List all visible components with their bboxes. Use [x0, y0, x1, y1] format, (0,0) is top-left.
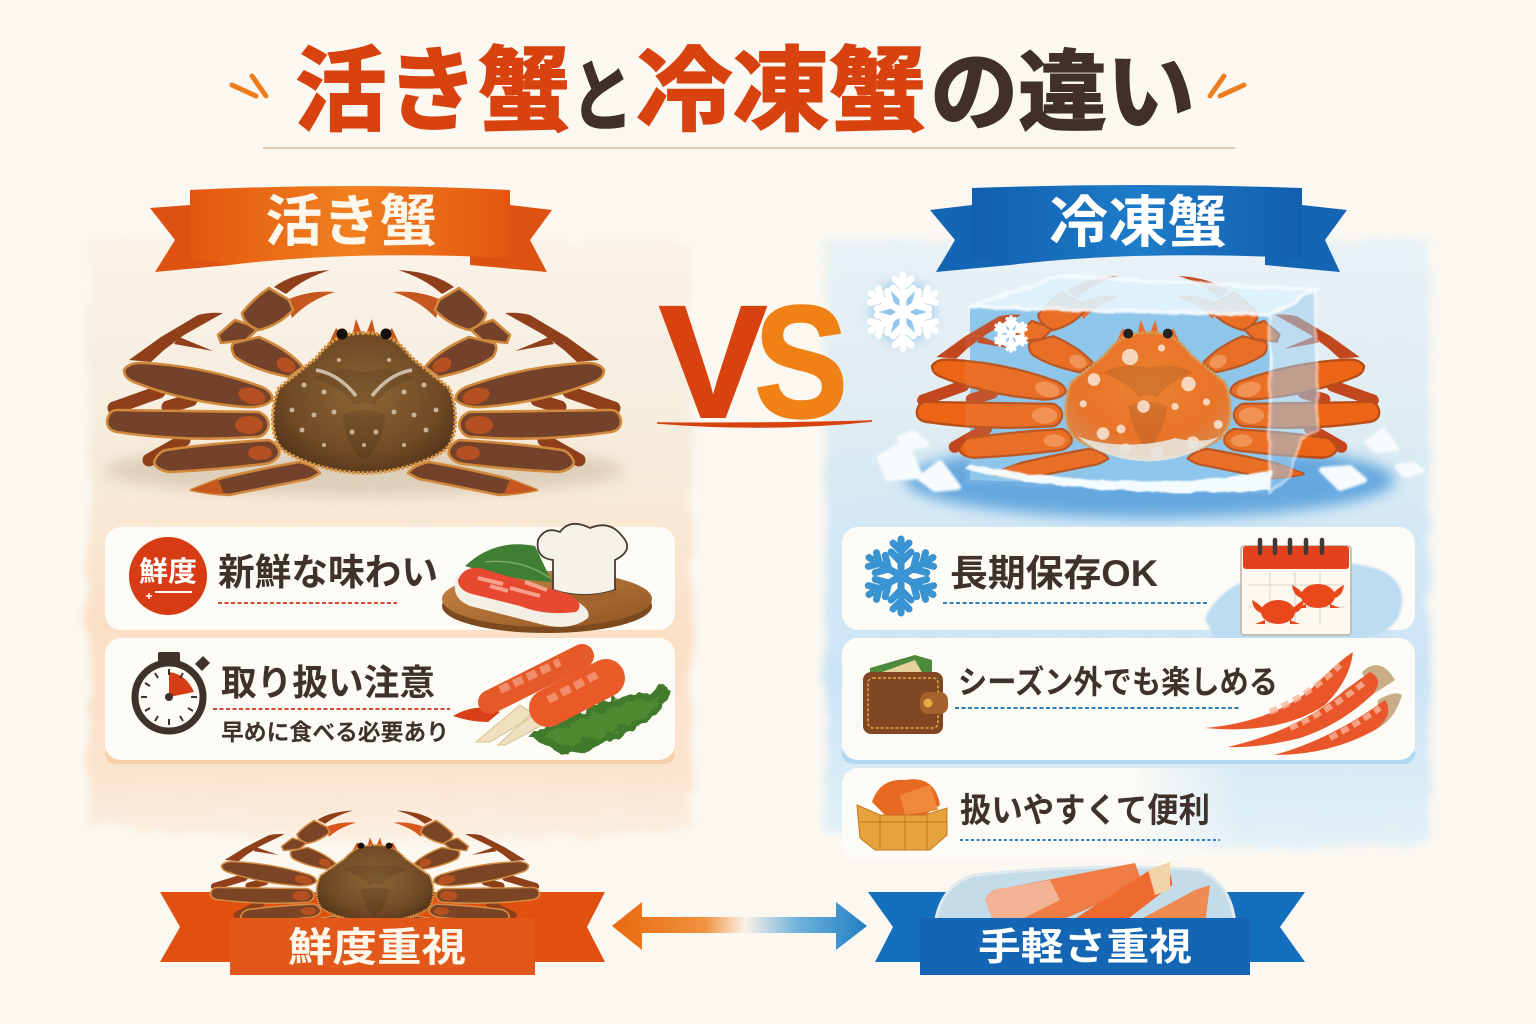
icon: stopwatch — [135, 652, 210, 731]
crab — [917, 276, 1379, 479]
small snowflake — [994, 317, 1028, 351]
banner: frozen crab — [930, 185, 1347, 272]
title: 冷凍蟹 — [636, 41, 926, 143]
badge: freshness — [129, 537, 207, 615]
banner: frozen crab: 冷凍蟹 — [1049, 191, 1227, 254]
title: の違い — [930, 43, 1195, 142]
bottom right: tray of crab legs — [935, 862, 1235, 925]
panel: frozen crab — [825, 240, 1430, 850]
snowflake: white on blue — [866, 275, 940, 349]
banner back: convenience focus — [868, 892, 1305, 962]
card: handling care — [105, 638, 675, 764]
icon: crab legs with greens — [453, 656, 664, 750]
text: fresh taste: 新鮮な味わい — [218, 552, 438, 593]
title — [295, 41, 1195, 143]
banner front: convenience focus: 手軽さ重視 — [978, 927, 1192, 969]
VS mark: S — [754, 272, 848, 451]
badge: freshness: 鮮度 — [139, 556, 197, 587]
ice chunks — [880, 431, 1421, 489]
banner: live crab — [150, 186, 552, 272]
icon: blue snowflake — [864, 539, 938, 613]
ice surface — [905, 442, 1395, 518]
banner front: freshness focus: 鮮度重視 — [288, 926, 466, 970]
icon: wallet — [863, 655, 948, 734]
icon: sushi plate and chef hat — [442, 524, 652, 633]
text: long storage: 長期保存OK — [950, 553, 1158, 594]
banner: live crab: 活き蟹 — [265, 190, 437, 253]
title: 活き蟹 — [295, 41, 570, 143]
illustration: frozen crab in ice — [880, 276, 1421, 518]
illustration: live crab — [104, 270, 624, 496]
title accents — [232, 76, 1244, 96]
banner front: convenience focus — [920, 918, 1250, 975]
text: eat soon: 早めに食べる必要あり — [221, 719, 449, 745]
card: easy and convenient — [842, 768, 1242, 860]
text: enjoy off-season: シーズン外でも楽しめる — [958, 664, 1278, 700]
banner back: freshness focus — [160, 892, 605, 962]
icon: calendar — [1241, 540, 1351, 635]
title: と — [571, 53, 633, 141]
icon: box of crab — [857, 779, 947, 850]
banner front: freshness focus — [230, 918, 535, 975]
watercolor blob — [1205, 563, 1402, 640]
card: off-season — [842, 638, 1415, 764]
ice block front — [966, 276, 1318, 492]
VS mark: V — [659, 272, 767, 451]
card: fresh taste — [105, 524, 675, 633]
VS mark — [657, 272, 872, 451]
arrow: double headed — [612, 902, 867, 950]
icon: frozen crab legs — [1205, 652, 1402, 755]
bottom left: crab — [211, 810, 539, 934]
text: easy to handle: 扱いやすくて便利 — [960, 792, 1210, 830]
text: handling care: 取り扱い注意 — [221, 662, 435, 703]
panel: live crab — [88, 240, 692, 840]
card: long storage — [842, 527, 1415, 640]
